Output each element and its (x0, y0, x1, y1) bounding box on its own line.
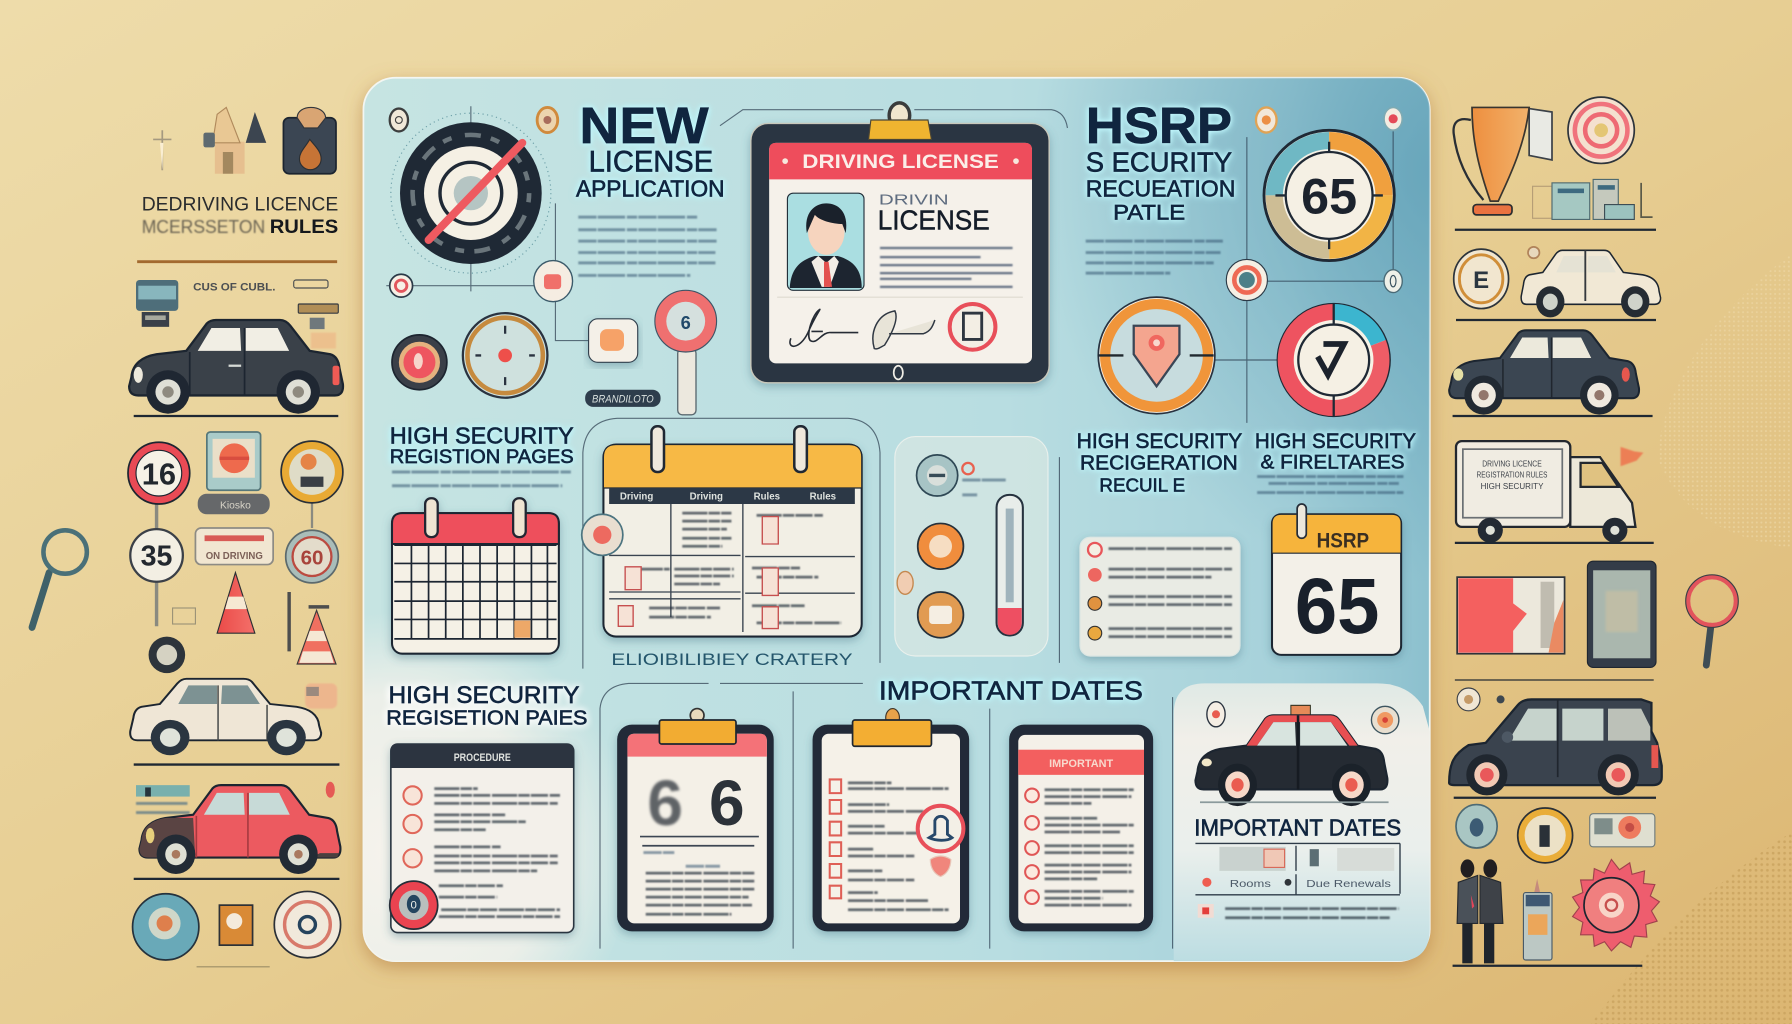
icon: orange tag (219, 905, 253, 945)
button: red ring (392, 335, 447, 390)
icon: monitor (136, 280, 178, 327)
dial: check (1278, 304, 1390, 416)
heading: high security registration plates lower (386, 682, 587, 730)
icon: red seal badge (1573, 859, 1659, 951)
photo (787, 193, 864, 290)
car: red sedan (139, 785, 340, 874)
icon: trophy (1454, 107, 1552, 215)
clipboard: dates list (1009, 725, 1153, 931)
clip (853, 709, 931, 746)
sign: red and gray ring: 60 (301, 547, 323, 570)
dial: 65: 65 (1301, 168, 1357, 225)
icon: two people (1457, 859, 1503, 963)
heading: driving licence rules: RULES (270, 216, 338, 238)
table header: Rules (810, 491, 836, 502)
red caution label (195, 528, 273, 565)
caption lines (1257, 477, 1403, 493)
divider (1455, 229, 1656, 231)
small captions: CUS OF CUBL. (193, 281, 275, 293)
table header: Driving (690, 491, 723, 502)
divider (1453, 965, 1642, 967)
divider (1456, 319, 1656, 321)
sign: speed 35 with post (130, 503, 183, 626)
license title: LICENSE (878, 205, 990, 236)
icon: gold coin (1518, 808, 1573, 863)
red card (1457, 577, 1565, 654)
icon: target (1568, 97, 1634, 163)
sign: speed 35 with post: 35 (141, 541, 173, 573)
calendar: 65 (1272, 504, 1401, 655)
pin marker (582, 514, 623, 555)
license title (878, 193, 990, 236)
dial: 65 (1264, 130, 1394, 261)
circle: steel (917, 455, 958, 496)
heading: driving licence rules: DEDRIVING LICENCE (142, 193, 338, 215)
binder rings (651, 426, 664, 472)
card header (769, 143, 1032, 179)
truck: REGISTRATION RULES (1477, 471, 1547, 480)
text block: application notes (578, 206, 720, 275)
card: taxi and dates (1174, 683, 1430, 961)
heading: hsrp security (1086, 96, 1235, 224)
small shield (930, 856, 951, 877)
card: requirements document: PROCEDURE (454, 752, 511, 764)
heading: hsrp security: PATLE (1113, 199, 1185, 224)
blurred caption (139, 245, 336, 249)
signature (790, 309, 858, 346)
truck (1456, 441, 1635, 543)
heading: hsrp security: S ECURITY (1086, 146, 1232, 177)
date table: Rooms (1230, 879, 1271, 890)
node: swirl (390, 274, 413, 297)
license title: DRIVIN (879, 193, 949, 209)
heading: high security registration required: RECIGERATION (1080, 452, 1238, 475)
second signature (873, 311, 935, 349)
caption row (1457, 558, 1577, 560)
node (1371, 706, 1399, 734)
heading: high security registration plates (390, 422, 574, 468)
gray label pill (198, 494, 270, 514)
date numerals: 6 (709, 767, 745, 839)
heading: new license application: LICENSE (589, 145, 713, 178)
panel: main board (363, 78, 1430, 961)
node: small gold ring (390, 109, 408, 131)
divider (134, 764, 339, 766)
dial: shield (1098, 297, 1215, 414)
license card (751, 103, 1049, 383)
heading: high security registration required: RECUIL E (1099, 474, 1185, 495)
traffic cone with pole (289, 592, 336, 664)
heading: high security and fine rates: HIGH SECURITY (1255, 428, 1416, 453)
card: checklist (1080, 537, 1240, 656)
heading: important dates card: IMPORTANT DATES (1194, 814, 1401, 840)
caption lines (392, 472, 571, 486)
clipboard: date (617, 709, 774, 931)
clipboard: checklist (813, 709, 969, 931)
dotted side texture (1657, 254, 1792, 549)
red seal (390, 881, 438, 929)
divider (1455, 679, 1654, 681)
sign: red and gray ring (286, 530, 338, 583)
dark pill label (585, 390, 661, 407)
circle: orange (918, 523, 963, 569)
sign: speed 16 (128, 442, 190, 504)
sign: speed 16: 16 (142, 457, 176, 492)
date numerals: 6 (647, 767, 683, 839)
divider (1453, 415, 1653, 417)
heading: driving licence rules: MCERSSETON (142, 216, 265, 237)
home button (894, 366, 903, 379)
date table (1195, 843, 1400, 895)
small node (1528, 247, 1539, 258)
text block: hsrp notes (1086, 230, 1225, 273)
icon: teal ring (1456, 805, 1497, 848)
heading: new license application: APPLICATION (576, 176, 725, 202)
round badge (1454, 249, 1509, 309)
icon: ticket (1590, 814, 1655, 847)
magnifier: right (1686, 575, 1738, 665)
table header (609, 488, 855, 504)
connectors (386, 106, 1393, 949)
divider (134, 878, 339, 880)
left column (32, 107, 343, 967)
dotted corner texture (1591, 832, 1792, 1024)
red caution label: ON DRIVING (206, 551, 263, 562)
date table: Due Renewals (1306, 879, 1391, 890)
car: dark sedan (1449, 330, 1639, 415)
accent rule (137, 260, 337, 263)
heading: hsrp security: HSRP (1086, 96, 1232, 154)
small red marker (326, 782, 335, 798)
node: camera (534, 261, 573, 302)
heading: high security and fine rates: & FIRELTARES (1261, 452, 1405, 474)
red band (1018, 750, 1144, 775)
node: orange (1256, 107, 1277, 133)
date numerals (647, 767, 745, 839)
heading: important dates: IMPORTANT DATES (879, 675, 1143, 705)
calendar: 65: 65 (1295, 562, 1379, 650)
heading: high security registration required: HIGH SECURITY (1077, 428, 1242, 453)
divider (1454, 797, 1656, 799)
circle: amber (918, 592, 963, 638)
badge (918, 806, 963, 851)
thermometer (997, 495, 1023, 635)
car: suv (1449, 699, 1662, 795)
heading: new license application (576, 96, 725, 202)
car: beige sedan (130, 679, 321, 755)
heading: high security registration plates: HIGH SECURITY (390, 422, 574, 448)
small nodes (1457, 688, 1505, 711)
car: black taxi (1195, 705, 1387, 806)
card header: DRIVING LICENSE (802, 151, 999, 173)
sign: yellow ring (281, 441, 343, 528)
heading: new license application: NEW (579, 96, 709, 154)
calendar: month grid (392, 498, 559, 654)
small notes (962, 463, 1006, 495)
node: small right (1384, 270, 1402, 293)
license details (880, 248, 1013, 287)
short rule (197, 966, 270, 968)
pin (897, 571, 913, 594)
red band: IMPORTANT (1049, 758, 1114, 770)
node: red (1384, 107, 1402, 130)
heading: high security and fine rates (1255, 428, 1416, 474)
mini card icon (136, 785, 190, 813)
heading: hsrp security: RECUEATION (1086, 176, 1235, 202)
wheel and trailer (149, 608, 270, 673)
small white card with orange mark (589, 319, 638, 362)
dark pill label: BRANDILOTO (592, 393, 654, 405)
label: eligibility criteria: ELIOIBILIBIEY CRATERY (611, 650, 853, 669)
magnifier: red: 6 (681, 312, 691, 333)
round badge: E (1473, 267, 1489, 294)
icon: house and lamp (203, 107, 266, 174)
calendar: 65: HSRP (1317, 527, 1369, 552)
node: small orange ring (537, 107, 558, 133)
table header: Driving (620, 491, 653, 502)
caption lines (1083, 498, 1246, 501)
icon: tag in padlock (283, 107, 336, 174)
node (1207, 702, 1225, 727)
right column (1449, 97, 1738, 966)
divider (134, 415, 338, 417)
icon: white dial (274, 891, 341, 958)
footnotes (1198, 904, 1399, 927)
heading: high security registration required (1077, 428, 1242, 495)
car: small beige (1521, 250, 1661, 317)
table rows (638, 513, 841, 623)
icon: stop card (207, 432, 261, 490)
table row icons (618, 517, 778, 629)
tablet (1587, 561, 1656, 667)
icon: no-entry dial (391, 113, 551, 273)
heading: high security registration plates lower: HIGH SECURITY (389, 682, 579, 709)
gauge (463, 313, 547, 398)
calendar: schedule table (582, 426, 862, 637)
traffic cone (217, 573, 255, 633)
icon: teal dial (133, 894, 199, 960)
panel: glass controls (895, 437, 1048, 656)
small cup icon (305, 683, 337, 709)
small captions (193, 280, 338, 349)
magnifier: red (655, 290, 717, 415)
truck: DRIVING LICENCE (1482, 459, 1542, 468)
truck: HIGH SECURITY (1481, 482, 1544, 491)
heading: driving licence rules (142, 193, 338, 238)
icon: bottle (1523, 879, 1552, 960)
clip (659, 709, 736, 744)
card body (769, 143, 1032, 363)
node: ring (1226, 259, 1267, 301)
heading: high security registration plates: REGISTION PAGES (390, 446, 574, 468)
icon: building (1533, 179, 1653, 219)
magnifier: left (32, 530, 87, 627)
stamp (950, 304, 995, 350)
gray label pill: Kiosko (220, 501, 251, 512)
small key marker (1621, 447, 1643, 466)
divider (1455, 542, 1654, 544)
icon: pin (153, 130, 171, 170)
red seal: 0 (411, 900, 417, 912)
card: requirements document (390, 744, 574, 933)
clip (869, 103, 931, 139)
heading: high security registration plates lower: REGISETION PAIES (386, 707, 587, 730)
car: black sedan (129, 320, 343, 414)
table header: Rules (754, 491, 780, 502)
